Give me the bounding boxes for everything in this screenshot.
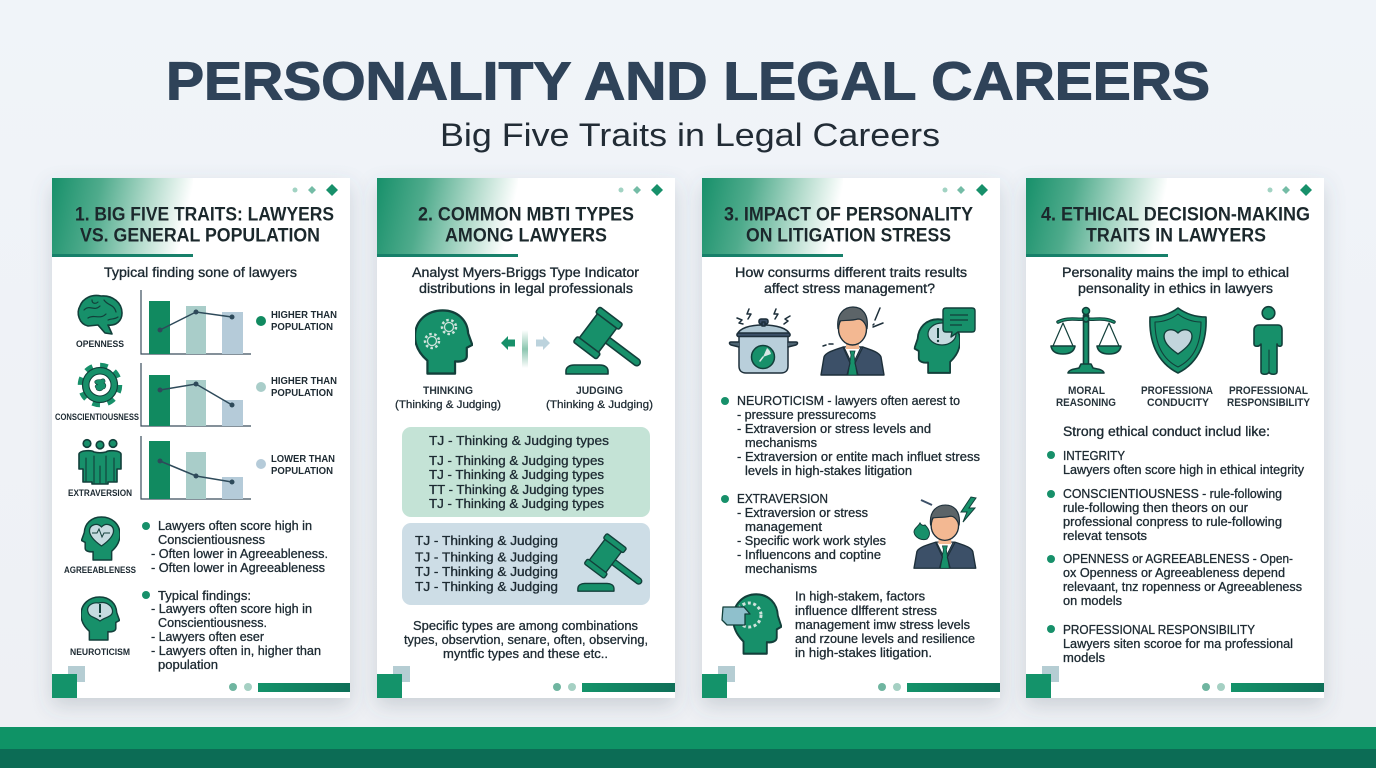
legend: higher than population <box>256 376 337 399</box>
box: thinking and judging list: TJ - Thinking & Judging <box>415 550 558 564</box>
text block: high-stakes summary <box>795 590 975 660</box>
panel heading: ON LITIGATION STRESS <box>746 224 951 246</box>
text block: neuroticism: mechanisms <box>745 436 817 450</box>
box: thinking and judging types: TJ - Thinking & Judging types <box>429 497 604 511</box>
text block: specific types: Specific types are among combinations <box>413 619 638 633</box>
label: openness: OPENNESS <box>76 338 124 349</box>
text block: integrity: Lawyers often score high in ethical integrity <box>1063 463 1305 477</box>
chart: conscientiousness <box>141 363 251 426</box>
icon: shield with heart <box>1150 308 1206 373</box>
icon: gavel <box>566 307 653 382</box>
panel: common MBTI types <box>377 178 675 698</box>
intro text <box>412 265 640 296</box>
icon: gear <box>81 366 119 404</box>
icon: lawyer under pressure <box>914 497 976 568</box>
icon: small gavel <box>578 533 652 598</box>
text block: conscientiousness: professional conpress to rule-following <box>1063 515 1282 529</box>
text block: neuroticism: - Extraversion or stress levels and <box>737 422 931 436</box>
corner decoration <box>618 184 663 196</box>
text block: neuroticism: - Extraversion or entite mach influet stress <box>737 450 980 464</box>
icon: pressure cooker <box>730 309 798 373</box>
icon: thinking head with gears <box>415 310 472 374</box>
footer decoration <box>377 666 675 698</box>
footer decoration <box>1026 666 1324 698</box>
text block: high-stakes summary: influence dlfferent stress <box>795 604 937 618</box>
panel heading: 1. BIG FIVE TRAITS: LAWYERS <box>75 204 334 226</box>
text block: high-stakes summary: in high-stakes litigation. <box>795 646 932 660</box>
header band <box>1026 178 1168 257</box>
footer decoration <box>702 666 1000 698</box>
text block: neuroticism: levels in high-stakes litigation <box>745 464 912 478</box>
label: moral reasoning: MORAL <box>1068 385 1105 397</box>
text block: specific types <box>404 619 648 661</box>
text block: typical findings: Typical findings: <box>158 589 251 603</box>
label: professional conduct: PROFESSIONA <box>1141 385 1213 397</box>
header band <box>52 178 193 257</box>
text block: typical findings: population <box>158 658 218 672</box>
intro text: Personality mains the impl to ethical <box>1062 265 1289 280</box>
box: thinking and judging list: TJ - Thinking & Judging <box>415 565 558 579</box>
text block: conscientiousness: rule-following then theors on our <box>1063 501 1248 515</box>
text block: professional responsibility: models <box>1063 651 1105 665</box>
panel heading: TRAITS IN LAWYERS <box>1086 224 1266 246</box>
legend: higher than population: HIGHER THAN <box>271 376 337 387</box>
corner decoration <box>1268 184 1312 196</box>
label: professional responsibility: RESPONSIBILITY <box>1227 397 1311 409</box>
intro text: How consurms different traits results <box>735 265 967 280</box>
label: thinking: (Thinking & Judging) <box>395 399 501 411</box>
intro text: distributions in legal professionals <box>419 281 633 296</box>
bottom band <box>0 727 1376 768</box>
label: moral reasoning <box>1056 385 1116 409</box>
icon: scales <box>1051 308 1121 373</box>
box: thinking and judging list <box>402 523 652 605</box>
text block: integrity: INTEGRITY <box>1063 449 1126 463</box>
text block: conscientiousness: relevat tensots <box>1063 529 1147 543</box>
panel heading <box>724 204 973 246</box>
header band <box>702 178 843 257</box>
label: judging: (Thinking & Judging) <box>546 399 653 411</box>
legend: lower than population: POPULATION <box>271 466 333 477</box>
text block: extraversion: - Extraversion or stress <box>737 506 868 520</box>
intro text: affect stress management? <box>764 281 935 296</box>
text block: specific types: types, observtion, senare, often, observing, <box>404 633 648 647</box>
legend: lower than population <box>256 454 335 477</box>
text block: openness or agreeableness: on models <box>1063 594 1122 608</box>
icon: head with speech bubble <box>914 308 975 373</box>
icon: brain <box>78 295 122 334</box>
legend: higher than population: POPULATION <box>271 322 333 333</box>
label: agreeableness: AGREEABLENESS <box>64 564 136 575</box>
text block: neuroticism: - pressure pressurecoms <box>737 408 876 422</box>
box: thinking and judging types <box>402 427 650 517</box>
label: thinking <box>395 385 501 411</box>
box: thinking and judging types: TJ - Thinking & Judging types <box>429 468 604 482</box>
text block: high-stakes summary: In high-stakem, factors <box>795 590 925 604</box>
text block: extraversion <box>721 492 886 576</box>
label: professional conduct: CONDUCITY <box>1147 397 1210 409</box>
text block: integrity <box>1047 449 1305 477</box>
intro text: Typical finding sone of lawyers <box>104 265 297 280</box>
text block: high-stakes summary: management imw stress levels <box>795 618 970 632</box>
text block: openness or agreeableness: OPENNESS or AGREEABLENESS - Open- <box>1063 552 1293 566</box>
label: professional responsibility <box>1227 385 1311 409</box>
subtitle: Big Five Traits in Legal Careers <box>440 117 940 153</box>
chart: openness <box>141 290 251 354</box>
panel heading: 4. ETHICAL DECISION-MAKING <box>1041 204 1310 226</box>
panel: ethical decision-making <box>1026 178 1324 698</box>
intro text: Analyst Myers-Briggs Type Indicator <box>412 265 640 280</box>
text block: openness or agreeableness: relevaant, tnz ropenness or Agreeableness <box>1063 580 1302 594</box>
text block: professional responsibility: PROFESSIONAL RESPONSIBILITY <box>1063 623 1256 637</box>
label: professional conduct <box>1141 385 1213 409</box>
text block: professional responsibility: Lawyers siten scoroe for ma professional <box>1063 637 1293 651</box>
panel heading <box>1041 204 1310 246</box>
text block: openness or agreeableness <box>1047 552 1302 608</box>
box: thinking and judging types: TJ - Thinking & Judging types <box>429 454 604 468</box>
box: thinking and judging list: TJ - Thinking & Judging <box>415 580 558 594</box>
chart: extraversion <box>141 436 251 499</box>
text block: typical findings: Conscientiousness. <box>158 616 267 630</box>
text block: extraversion: mechanisms <box>745 562 817 576</box>
text block: specific types: myntfic types and these etc.. <box>443 647 608 661</box>
text block: agreeableness findings: - Often lower in Agreeableness <box>151 561 325 575</box>
label: judging: JUDGING <box>576 385 623 397</box>
text: strong ethical conduct: Strong ethical conduct includ like: <box>1063 424 1270 439</box>
label: conscientiousness: CONSCIENTIOUSNESS <box>55 411 139 422</box>
panel heading: VS. GENERAL POPULATION <box>80 224 320 246</box>
corner decoration <box>292 184 338 196</box>
panel heading <box>418 204 634 246</box>
icon: people <box>79 440 121 484</box>
label: judging <box>546 385 653 411</box>
text block: typical findings <box>142 589 321 672</box>
text block: extraversion: - Influencons and coptine <box>737 548 881 562</box>
text block: conscientiousness: CONSCIENTIOUSNESS - rule-following <box>1063 487 1282 501</box>
legend: higher than population: POPULATION <box>271 388 333 399</box>
text block: extraversion: EXTRAVERSION <box>737 492 828 506</box>
corner decoration <box>942 184 988 196</box>
icon: agreeableness head <box>81 517 120 560</box>
panel heading: 3. IMPACT OF PERSONALITY <box>724 204 973 226</box>
text block: agreeableness findings: Conscientiousness <box>158 533 265 547</box>
footer decoration <box>52 666 350 698</box>
panel: big five traits <box>52 178 350 698</box>
text block: typical findings: - Lawyers often eser <box>151 630 264 644</box>
text block: agreeableness findings <box>142 519 328 575</box>
box: thinking and judging list: TJ - Thinking & Judging <box>415 534 558 548</box>
label: moral reasoning: REASONING <box>1056 397 1116 409</box>
label: professional responsibility: PROFESSIONAL <box>1229 385 1308 397</box>
text block: typical findings: - Lawyers often score high in <box>151 602 312 616</box>
panel heading <box>75 204 334 246</box>
arrows: thinking versus judging <box>501 330 550 368</box>
text block: openness or agreeableness: ox Openness or Agreeableness depend <box>1063 566 1285 580</box>
text block: neuroticism <box>721 394 980 478</box>
text block: typical findings: - Lawyers often in, higher than <box>151 644 321 658</box>
icon: person <box>1254 307 1282 374</box>
intro text: pensonality in ethics in lawyers <box>1078 281 1273 296</box>
text block: extraversion: - Specific work work styles <box>737 534 886 548</box>
box: thinking and judging types: TJ - Thinking & Judging types <box>429 434 609 448</box>
box: thinking and judging types: TT - Thinking & Judging types <box>429 483 604 497</box>
legend: higher than population: HIGHER THAN <box>271 310 337 321</box>
label: extraversion: EXTRAVERSION <box>68 487 132 498</box>
panel heading: 2. COMMON MBTI TYPES <box>418 204 634 226</box>
icon: neuroticism head <box>81 597 120 640</box>
header band <box>377 178 518 257</box>
text block: conscientiousness <box>1047 487 1282 543</box>
legend: lower than population: LOWER THAN <box>271 454 335 465</box>
icon: stressed lawyer <box>821 307 884 375</box>
text block: neuroticism: NEUROTICISM - lawyers often aerest to <box>737 394 960 408</box>
panel heading: AMONG LAWYERS <box>445 224 607 246</box>
legend: higher than population <box>256 310 337 333</box>
label: neuroticism: NEUROTICISM <box>70 646 130 657</box>
intro text <box>735 265 967 296</box>
text block: agreeableness findings: Lawyers often score high in <box>158 519 312 533</box>
text block: agreeableness findings: - Often lower in Agreeableness. <box>151 547 328 561</box>
label: thinking: THINKING <box>423 385 473 397</box>
text block: extraversion: management <box>745 520 823 534</box>
text block: professional responsibility <box>1047 623 1293 665</box>
title: PERSONALITY AND LEGAL CAREERS <box>166 52 1210 112</box>
panel: litigation stress <box>702 178 1000 698</box>
text block: high-stakes summary: and rzoune levels and resilience <box>795 632 975 646</box>
intro text <box>1062 265 1289 296</box>
icon: head with gears <box>722 594 781 654</box>
